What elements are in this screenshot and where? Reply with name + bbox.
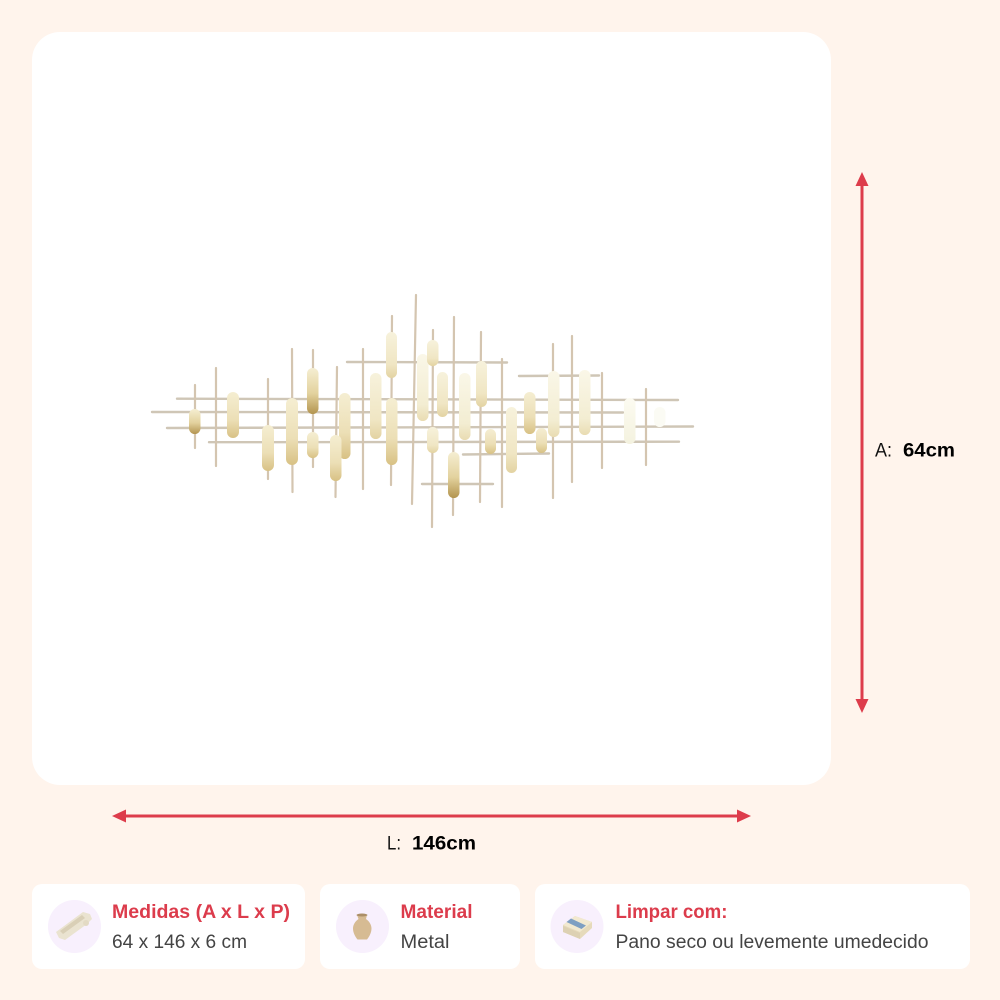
label: width: 146cm [412,834,476,854]
label: width: L: [387,834,401,854]
card: limpar [535,884,970,969]
label: height: 64cm [903,440,955,462]
icon: towel [550,900,604,953]
arrow: height [856,172,868,713]
wall art: golden metal rods and pills [152,295,693,527]
text: limpar [616,902,928,953]
text: medidas: Medidas (A x L x P) [112,902,290,923]
text: material: Metal [400,932,450,953]
text: limpar: Pano seco ou levemente umedecido [616,932,928,953]
panel: product image [32,32,831,785]
label: height [875,440,955,462]
text: medidas: 64 x 146 x 6 cm [112,932,247,953]
text: limpar: Limpar com: [616,902,728,923]
icon: vase [336,900,389,953]
text: material [400,902,472,953]
horizontal rods [152,362,693,484]
text: medidas [112,902,290,953]
text: material: Material [400,902,472,923]
card: medidas [32,884,305,969]
label: width [387,834,476,854]
icon: ruler [48,900,101,953]
arrow: width [112,810,751,822]
vertical rods [195,295,646,527]
card: material [320,884,520,969]
pills [189,332,666,498]
label: height: A: [875,440,892,462]
